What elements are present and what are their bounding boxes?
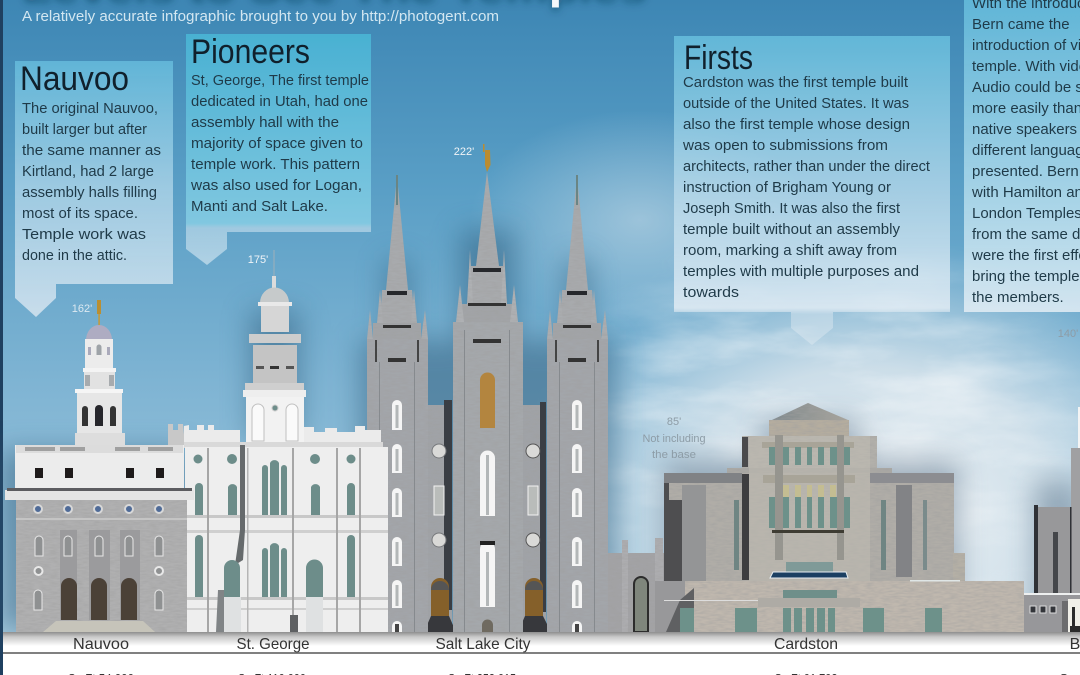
side windows and doors (424, 444, 551, 632)
callout: Firsts: towards (683, 284, 739, 301)
height labels: 222' (454, 146, 474, 158)
central tower (453, 172, 523, 632)
callout: Nauvoo: most of its space. (22, 205, 138, 222)
height labels: 140' (1058, 328, 1078, 340)
height labels: 175' (248, 254, 268, 266)
height labels: the base (652, 449, 696, 461)
callout: Firsts: Cardston was the first temple built (683, 74, 909, 91)
st george tower (243, 250, 306, 443)
callout: Pioneers: dedicated in Utah, had one (191, 93, 368, 110)
subtitle: A relatively accurate infographic brought to you by http://photogent.com (22, 8, 499, 25)
temple name labels: Salt Lake City (436, 636, 530, 653)
height labels: 85' (667, 416, 681, 428)
ground band and rule (3, 632, 1080, 675)
temple name labels (73, 636, 1080, 653)
nauvoo attic (15, 445, 184, 488)
st george walls (168, 424, 388, 632)
st george door stairs (224, 597, 323, 632)
callout: Pioneers: Manti and Salt Lake. (191, 198, 328, 215)
callout: Firsts: Joseph Smith. It was also the first (683, 200, 901, 217)
callout: Pioneers: St, George, The first temple (191, 72, 369, 89)
nauvoo lower walls (5, 488, 194, 632)
temple: Bern (cropped) (1024, 407, 1080, 632)
callout: Firsts (674, 36, 950, 345)
entrance and base doors (680, 590, 942, 632)
callout: Bern (cropped): Bern came the (972, 16, 1070, 33)
temple name labels: St. George (236, 636, 310, 653)
callout: Pioneers: temple work. This pattern (191, 156, 360, 173)
callout: Pioneers: was also used for Logan, (190, 177, 362, 194)
callout: Nauvoo: done in the attic. (22, 247, 127, 264)
side tower windows (375, 175, 599, 632)
callout: Nauvoo (15, 60, 173, 317)
height labels: 162' (72, 303, 92, 315)
cardston shading (655, 435, 960, 632)
callout: Pioneers: majority of space given to (191, 135, 363, 152)
dark wall shadows (444, 400, 546, 612)
temple: St. George (168, 250, 388, 632)
callout: Pioneers: assembly hall with the (191, 114, 339, 131)
nauvoo tower (75, 300, 125, 445)
callout: Pioneers (186, 33, 371, 265)
st george windows (194, 454, 356, 597)
callout: Nauvoo: Nauvoo (20, 60, 129, 98)
callout: Nauvoo: assembly halls filling (22, 184, 157, 201)
annex window (634, 577, 648, 632)
callout: Nauvoo: the same manner as (22, 142, 161, 159)
callout: Nauvoo: Kirtland, had 2 large (22, 163, 154, 180)
callout: Firsts: also the first temple whose design (683, 116, 910, 133)
cardston lower windows (769, 485, 850, 533)
building shadows (0, 230, 615, 630)
callout: Nauvoo: The original Nauvoo, (22, 100, 158, 117)
callout: Firsts: Firsts (684, 39, 753, 77)
callout: Bern (cropped) (964, 0, 1080, 312)
callout: Firsts: architects, rather than under the direct (683, 158, 931, 175)
temple: Cardston (655, 403, 1024, 632)
height labels (72, 146, 1078, 461)
callout: Firsts: temples with multiple purposes and (683, 263, 919, 280)
glass canopy (770, 562, 848, 578)
callout: Firsts: was open to submissions from (682, 137, 888, 154)
annex wing (608, 538, 664, 632)
callout: Firsts: instruction of Brigham Young or (683, 179, 891, 196)
callout: Nauvoo: built larger but after (22, 121, 147, 138)
angel moroni (483, 144, 490, 172)
cardston upper windows (769, 447, 850, 465)
cardston walls (664, 403, 1024, 632)
callout: Firsts: room, marking a shift away from (683, 242, 897, 259)
temple: Nauvoo (5, 300, 194, 632)
temple name labels: Nauvoo (73, 636, 129, 653)
square footage row (cropped) (68, 671, 1080, 675)
callout: Firsts: temple built without an assembly (683, 221, 900, 238)
callout: Pioneers: Pioneers (191, 33, 310, 71)
temple name labels: Cardston (774, 636, 838, 653)
callout: Bern (cropped): the members. (972, 289, 1064, 306)
connecting walls (428, 405, 546, 632)
cardston shadow (664, 420, 1080, 620)
side tower masonry (367, 176, 608, 632)
callout: Nauvoo: Temple work was (22, 226, 146, 243)
temple: Salt Lake City (367, 144, 664, 632)
height labels: Not including (642, 433, 706, 445)
callout: Firsts: outside of the United States. It was (683, 95, 909, 112)
